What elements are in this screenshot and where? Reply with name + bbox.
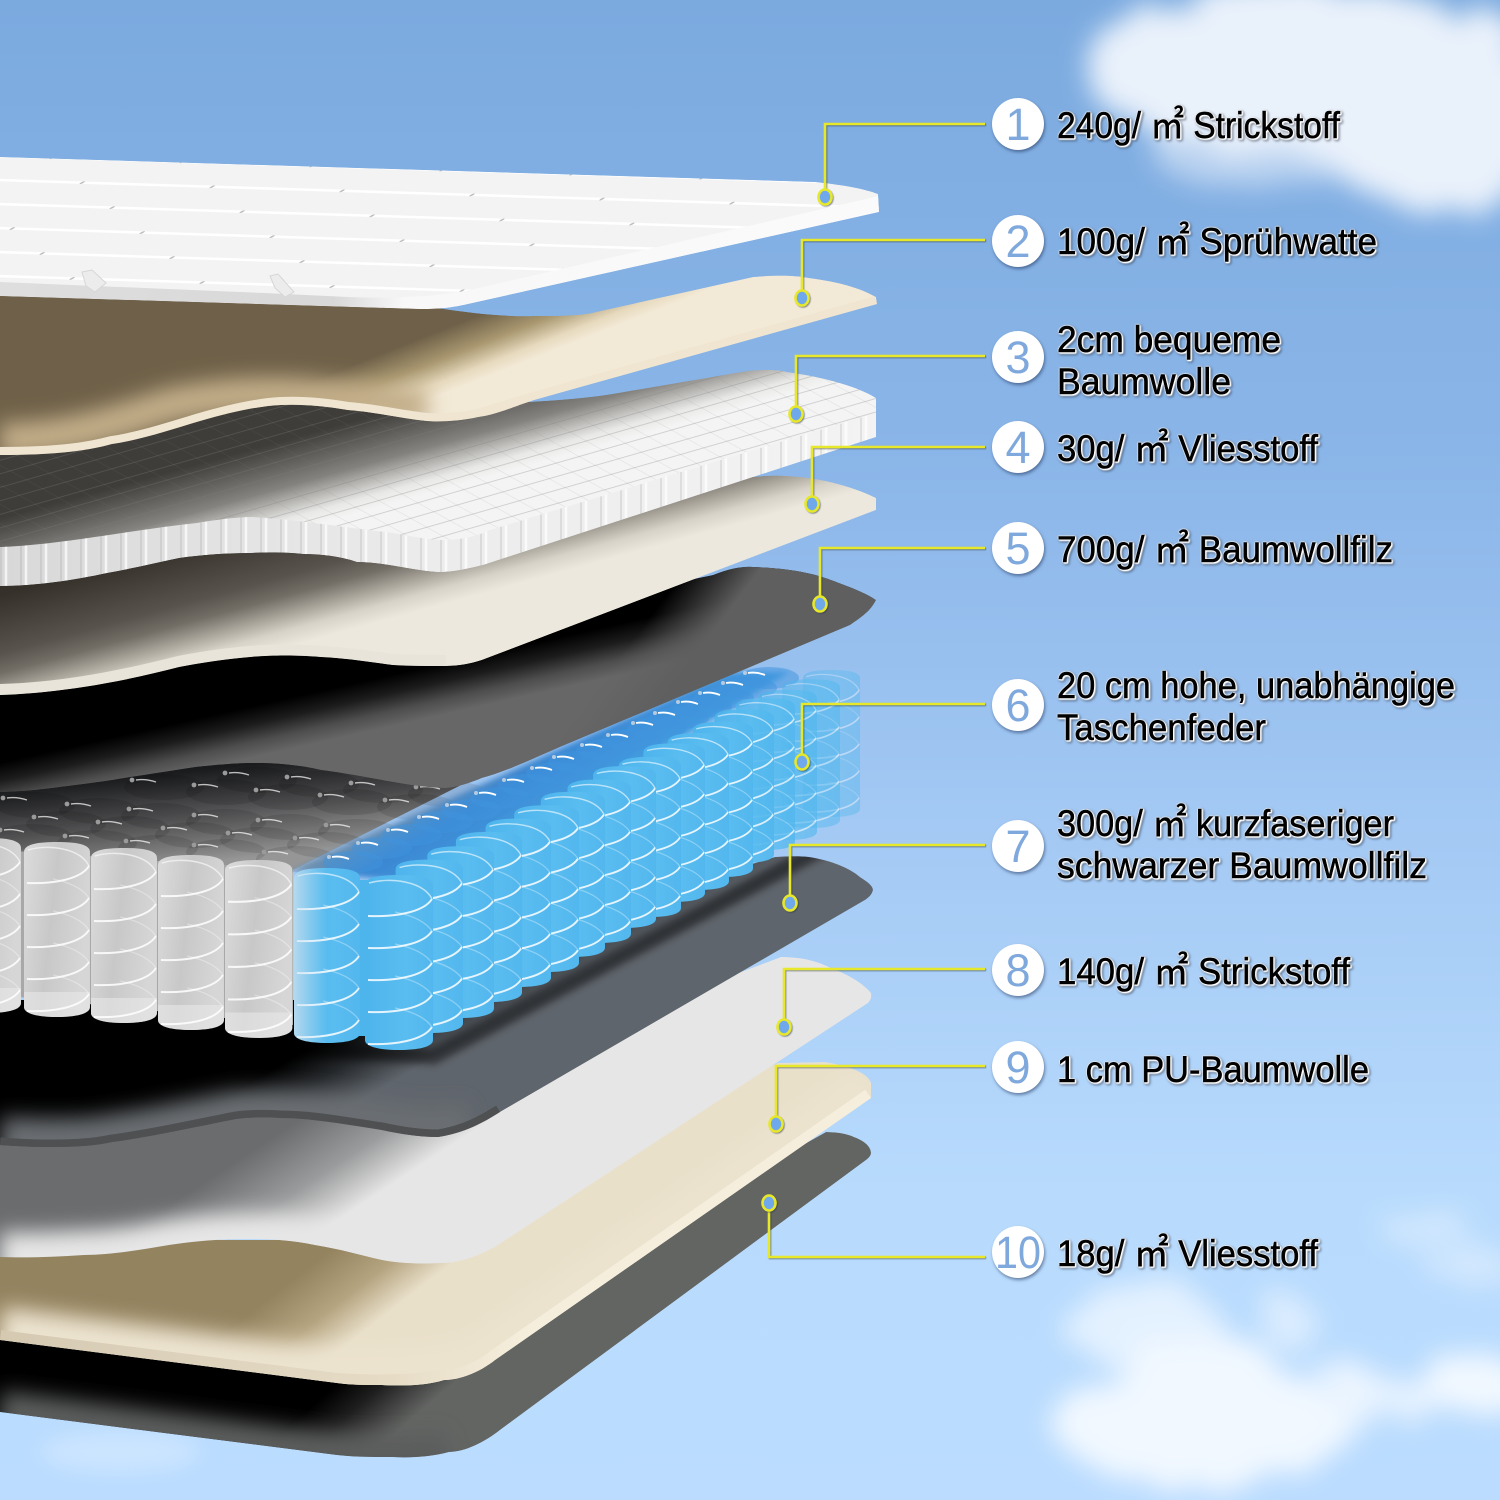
spring top surface: blue side (292, 672, 790, 885)
badge 5 (992, 522, 1044, 574)
label 10: 18g/ ㎡ Vliesstoff (1057, 1232, 1319, 1274)
dot 7 (784, 896, 796, 910)
callout 6 (796, 665, 1455, 770)
spring top marks (0, 767, 488, 872)
label 2: 100g/ ㎡ Sprühwatte (1057, 220, 1377, 262)
dot 4 (806, 496, 818, 512)
label 7 (1057, 802, 1427, 886)
leader 8 (784, 969, 985, 1027)
layer 3: quilted white cotton (0, 370, 876, 586)
leader 2 (802, 240, 985, 298)
badge 7 (992, 820, 1044, 872)
dot 1 (818, 190, 832, 204)
badge 8 (992, 944, 1044, 996)
callout 1 (818, 98, 1341, 204)
callout 2 (796, 215, 1377, 306)
layer 1 front edge (0, 196, 879, 309)
layer 3 front edge (0, 413, 876, 586)
layer 1 tufts (82, 270, 294, 297)
badge 4: 4 (1005, 422, 1031, 473)
spring row 2 tops (323, 667, 799, 873)
dot 3 (790, 406, 802, 422)
badge 6: 6 (1005, 680, 1031, 731)
spring row 1: blue side columns (396, 670, 860, 1033)
callout 3 (790, 319, 1281, 422)
layer 6: pocket springs (0, 667, 860, 1050)
layer 1: white knitted top (0, 157, 879, 309)
badge 3 (992, 331, 1044, 383)
badge 5: 5 (1005, 523, 1031, 574)
layer 5: dark cotton felt (0, 567, 876, 792)
badge 1: 1 (1005, 99, 1031, 150)
label 9: 1 cm PU-Baumwolle (1057, 1049, 1369, 1090)
label 6: Taschenfeder (1057, 707, 1266, 748)
layer 7: black short-fibre felt (0, 828, 873, 1147)
badge 9: 9 (1005, 1042, 1031, 1093)
leader 9 (776, 1066, 985, 1124)
layer 2: beige spray wadding (0, 276, 877, 455)
leader 3 (796, 356, 985, 414)
callout 9 (770, 1041, 1369, 1132)
label 3: 2cm bequeme (1057, 319, 1281, 360)
layer 10: dark bottom fleece (0, 1132, 871, 1457)
badge 1 (992, 98, 1044, 150)
callout 10 (762, 1196, 1319, 1278)
cloud bottom right (1055, 1218, 1500, 1487)
layer 4: cream fleece (0, 476, 876, 695)
blue column backing (340, 880, 380, 1036)
spring column backing (0, 850, 293, 1025)
badge 8: 8 (1005, 945, 1031, 996)
label 3: Baumwolle (1057, 361, 1231, 402)
cloud bottom left glow (40, 1432, 200, 1472)
leader 5 (820, 548, 985, 604)
spring row: white front columns (0, 838, 292, 1038)
dot 6 (796, 754, 808, 770)
label 6 (1057, 665, 1455, 748)
dot 5 (814, 596, 826, 612)
label 3 (1057, 319, 1281, 402)
front blue column (365, 875, 433, 1050)
label 1: 240g/ ㎡ Strickstoff (1057, 104, 1341, 146)
leader 1 (825, 124, 985, 197)
leader 7 (790, 845, 985, 903)
corner blue column (294, 868, 360, 1043)
dot 8 (778, 1020, 790, 1034)
badge 9 (992, 1041, 1044, 1093)
badge 7: 7 (1005, 821, 1031, 872)
label 5: 700g/ ㎡ Baumwollfilz (1057, 528, 1393, 570)
callout 7 (784, 802, 1427, 910)
label 8: 140g/ ㎡ Strickstoff (1057, 950, 1351, 992)
badge 2: 2 (1005, 216, 1031, 267)
clouds (1055, 0, 1500, 1487)
label 6: 20 cm hohe, unabhängige (1057, 665, 1455, 706)
callout 4 (806, 421, 1319, 512)
badge 10: 10 (995, 1227, 1041, 1278)
label 7: 300g/ ㎡ kurzfaseriger (1057, 802, 1394, 844)
dot 10 (762, 1196, 776, 1210)
label 4: 30g/ ㎡ Vliesstoff (1057, 427, 1319, 469)
dot 2 (796, 290, 808, 306)
label 7: schwarzer Baumwollfilz (1057, 845, 1427, 886)
callout 8 (778, 944, 1351, 1034)
dot 9 (770, 1116, 782, 1132)
badge 4 (992, 421, 1044, 473)
leader 6 (802, 704, 985, 762)
badge 6 (992, 679, 1044, 731)
cloud top right (1085, 0, 1500, 210)
layer 8: light knitted fabric (0, 957, 871, 1264)
badge 3: 3 (1005, 332, 1031, 383)
spring top surface: dark side (0, 735, 560, 870)
callout 5 (814, 522, 1393, 612)
layer 9: beige PU foam (0, 1062, 871, 1385)
leader 10 (769, 1203, 985, 1257)
badge 2 (992, 215, 1044, 267)
leader 4 (812, 447, 985, 504)
